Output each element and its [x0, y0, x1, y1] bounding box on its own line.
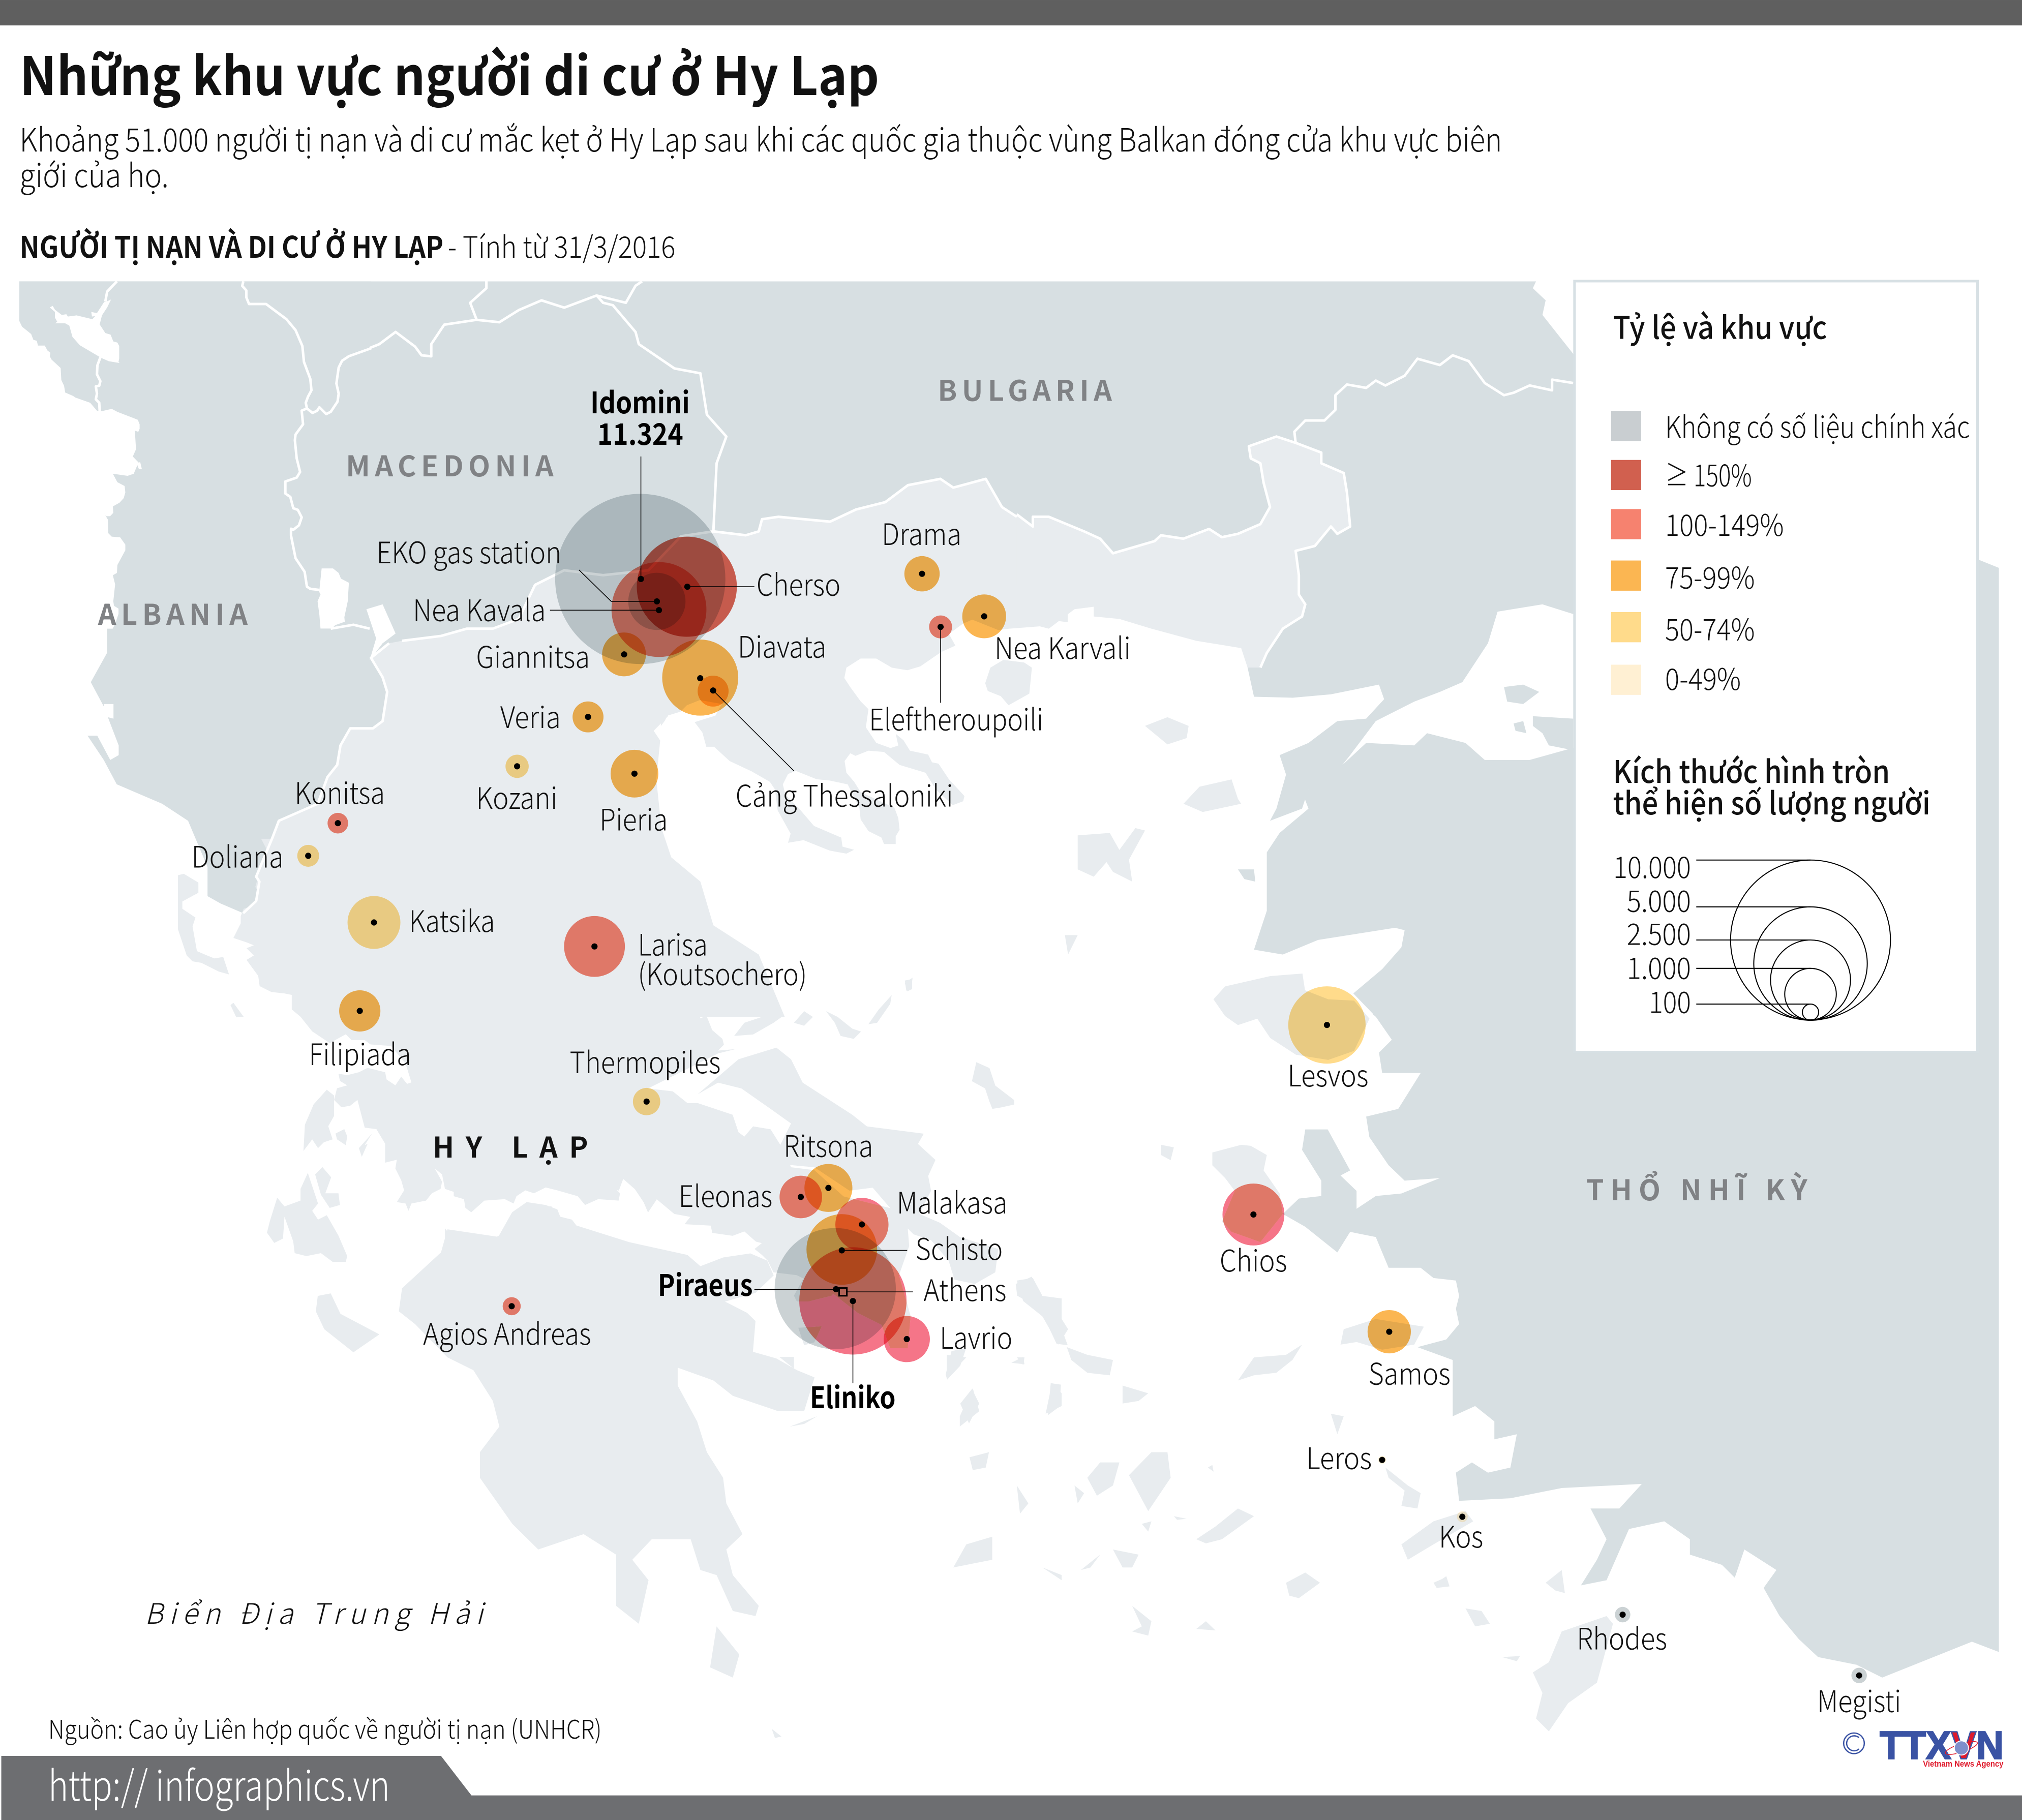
country labels: MACEDONIA: [346, 444, 554, 485]
site labels: Diavata: [738, 623, 826, 666]
site labels: Filipiada: [309, 1030, 411, 1074]
map: refugee site circles: [297, 494, 1867, 1683]
site labels: Thermopiles: [570, 1039, 720, 1082]
legend key: over 150: [1611, 451, 1752, 495]
legend heading: rate: Tỷ lệ và khu vực: [1613, 303, 1827, 348]
top bar: [0, 0, 2022, 25]
country labels: HY LẠP: [433, 1125, 588, 1166]
site labels: Pieria: [599, 796, 668, 839]
Lesvos circle: [1288, 986, 1366, 1064]
leader lines: [550, 457, 941, 1383]
intro text: [20, 114, 1502, 197]
Samos circle: [1368, 1310, 1411, 1353]
logo: TTXVN: TTXVN: [1880, 1724, 2004, 1768]
logo: TTXVN: Vietnam News Agency: [1923, 1760, 2004, 1769]
legend key: 75-99: 75-99%: [1665, 554, 1755, 597]
site labels: Samos: [1368, 1350, 1451, 1393]
site labels: Cherso: [757, 561, 840, 604]
Athens marker: [839, 1288, 847, 1296]
legend heading: circle size: [1613, 747, 1930, 824]
site labels: Leros: [1306, 1435, 1372, 1478]
site labels: Eleftheroupoili: [869, 695, 1043, 739]
size legend values: 10.000: [1613, 843, 1691, 887]
size legend values: [1613, 843, 1691, 1022]
site labels: Ritsona: [783, 1123, 873, 1166]
site labels: Lesvos: [1288, 1052, 1369, 1095]
Katsika circle: [348, 896, 401, 949]
size legend values: 100: [1649, 979, 1691, 1022]
Eliniko circle: [799, 1247, 907, 1354]
legend key: 50-74: [1611, 606, 1755, 649]
footer url: http:// infographics.vn: [48, 1753, 390, 1813]
Kozani circle: [505, 755, 529, 778]
site labels: Piraeus: [658, 1261, 752, 1305]
country labels: ALBANIA: [98, 592, 248, 633]
Filipiada circle: [339, 990, 380, 1032]
Cherso circle: [637, 537, 737, 636]
site labels: Agios Andreas: [423, 1310, 591, 1353]
source: Nguồn: Cao ủy Liên hợp quốc về người tị nạn (UNHCR): [48, 1709, 601, 1746]
site labels: Rhodes: [1577, 1615, 1667, 1658]
site labels: Kozani: [476, 774, 557, 817]
site labels: 11.324: [597, 410, 683, 453]
Nea Kavala circle: [612, 562, 706, 657]
Agios Andreas circle: [503, 1297, 521, 1315]
EKO gas station circle: [628, 573, 685, 630]
site labels: Drama: [882, 510, 961, 554]
Veria circle: [572, 702, 603, 733]
Giannitsa circle: [602, 632, 646, 676]
legend key: 75-99: [1611, 554, 1755, 597]
legend heading: circle size: Kích thước hình tròn: [1613, 747, 1890, 792]
Diavata circle: [662, 640, 738, 716]
country borders and lakes: [96, 281, 1573, 913]
site labels: Cảng Thessaloniki: [736, 772, 953, 815]
neighbouring countries: [19, 281, 1999, 1678]
panel: legend: [1575, 281, 1977, 1052]
site labels: Nea Kavala: [413, 587, 546, 630]
Schisto circle: [806, 1214, 877, 1285]
Chios circle: [1222, 1184, 1284, 1246]
site labels: Schisto: [916, 1225, 1003, 1268]
intro text: Khoảng 51.000 người tị nạn và di cư mắc kẹt ở Hy Lạp sau khi các quốc gia thuộc vùng Balkan đóng cửa khu vực biên: [20, 114, 1502, 161]
Megisti marker: [1851, 1668, 1867, 1683]
title: Những khu vực người di cư ở Hy Lạp: [20, 34, 879, 110]
Eleonas circle: [779, 1176, 822, 1218]
size legend nested circles: [1696, 860, 1890, 1020]
site labels: (Koutsochero): [638, 950, 807, 993]
site labels: Katsika: [409, 897, 495, 941]
Idomini circle: [555, 494, 726, 664]
site labels: Athens: [924, 1266, 1007, 1310]
site labels: Eleonas: [679, 1172, 772, 1216]
site labels: Larisa: [638, 921, 708, 964]
size legend values: 1.000: [1627, 945, 1691, 988]
legend key: over 150: ≥ 150%: [1665, 451, 1752, 495]
Drama circle: [904, 556, 940, 591]
country labels: THỔ NHĨ KỲ: [1586, 1168, 1807, 1209]
Larisa circle: [564, 916, 625, 977]
Greece mainland and islands: [178, 437, 1613, 1738]
Ritsona circle: [804, 1164, 853, 1212]
intro text: giới của họ.: [20, 150, 169, 197]
site labels: Malakasa: [897, 1179, 1007, 1222]
size legend values: 5.000: [1627, 877, 1691, 920]
Kos marker: [1457, 1511, 1468, 1522]
site labels: Eliniko: [810, 1374, 895, 1417]
size legend values: 2.500: [1627, 911, 1691, 954]
site labels: Kos: [1439, 1513, 1483, 1556]
site labels: Idomini: [590, 379, 690, 422]
legend key: 0-49: [1611, 655, 1741, 699]
legend key: no data: Không có số liệu chính xác: [1665, 403, 1970, 446]
Piraeus circle: [775, 1228, 896, 1349]
country labels: [98, 368, 1807, 1632]
site labels: Giannitsa: [476, 633, 590, 676]
site labels: Veria: [500, 693, 561, 737]
legend heading: circle size: thể hiện số lượng người: [1613, 778, 1930, 824]
country labels: Biển Địa Trung Hải: [145, 1591, 487, 1632]
site labels: Lavrio: [940, 1314, 1012, 1357]
legend key: 100-149: [1611, 501, 1784, 544]
Thessaloniki port circle: [698, 676, 729, 707]
site labels: [192, 379, 1901, 1721]
site labels: EKO gas station: [376, 529, 561, 572]
legend key: 50-74: 50-74%: [1665, 606, 1755, 649]
Malakasa circle: [835, 1198, 889, 1251]
Doliana circle: [297, 845, 319, 867]
Nea Karvali circle: [962, 594, 1006, 639]
legend key: 100-149: 100-149%: [1665, 501, 1784, 544]
site labels: Konitsa: [295, 769, 385, 812]
Lavrio circle: [884, 1316, 930, 1362]
Thermopiles circle: [633, 1088, 660, 1115]
Leros marker: [1378, 1456, 1386, 1464]
site labels: Nea Karvali: [994, 624, 1131, 668]
Konitsa circle: [327, 813, 348, 834]
Pieria circle: [611, 750, 658, 798]
Eleftheroupoli circle: [929, 616, 952, 639]
subheading: NGƯỜI TỊ NẠN VÀ DI CƯ Ở HY LẠP: [20, 223, 443, 266]
map: land base: [19, 281, 1999, 1738]
site labels: Doliana: [192, 833, 283, 876]
legend key: 0-49: 0-49%: [1665, 655, 1741, 699]
site labels: Megisti: [1817, 1678, 1901, 1721]
country labels: BULGARIA: [938, 368, 1112, 409]
footer bar: [2, 1756, 2022, 1820]
site labels: Chios: [1220, 1237, 1287, 1280]
Rhodes marker: [1615, 1607, 1631, 1622]
subheading: - Tính từ 31/3/2016: [448, 223, 676, 266]
